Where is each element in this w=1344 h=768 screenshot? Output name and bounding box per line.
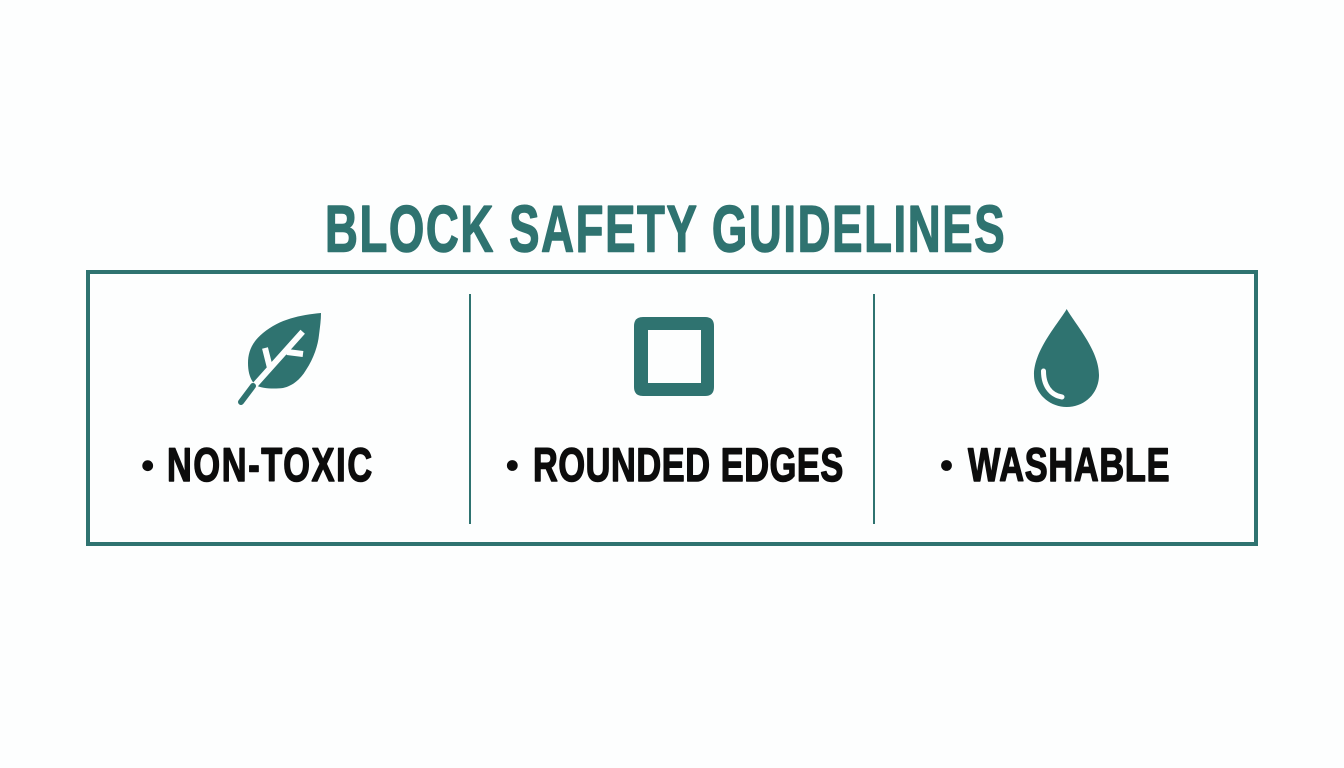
- icon: water drop: [1034, 309, 1099, 407]
- label: non-toxic: NON-TOXIC: [167, 439, 372, 491]
- panel: guidelines frame: [88, 272, 1256, 544]
- label: rounded edges: ROUNDED EDGES: [533, 439, 843, 491]
- icon: rounded square: [634, 317, 714, 396]
- icon: leaf: [241, 313, 321, 402]
- title: BLOCK SAFETY GUIDELINES: [325, 193, 1005, 267]
- label: washable: WASHABLE: [968, 439, 1169, 491]
